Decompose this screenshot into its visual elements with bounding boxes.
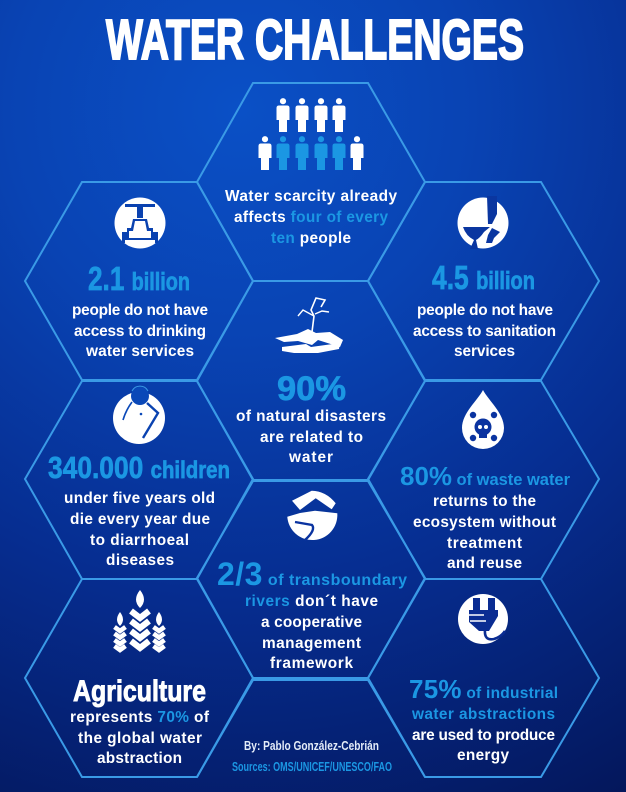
text: drinking water: people do not have (72, 302, 208, 319)
icon: people (258, 98, 364, 170)
text: sanitation: access to sanitation (413, 323, 556, 340)
text: scarcity: ten people (271, 230, 351, 247)
heading: 80% of waste water: 80% of waste water (400, 461, 571, 491)
text: waste water (413, 493, 556, 572)
heading: 2/3 of transboundary: 2/3 of transboundary (217, 556, 407, 592)
icon: child (113, 386, 165, 444)
heading: 340.000 children: 340.000 children (48, 450, 230, 485)
hexagon outline (25, 579, 253, 777)
text: drinking water (72, 302, 208, 360)
heading: 75% of industrial: 75% of industrial (409, 674, 558, 704)
text: children: diseases (106, 552, 174, 569)
icon: dry tree on cracked earth (275, 298, 343, 353)
text: children: to diarrhoeal (90, 532, 189, 549)
text: rivers: a cooperative (261, 614, 362, 631)
panel: credits (197, 680, 425, 777)
icon: toxic water drop (462, 390, 504, 449)
text: sanitation: services (454, 343, 515, 360)
text: children: under five years old (64, 490, 215, 507)
text: drinking water: access to drinking (74, 323, 206, 340)
hexagon outline (197, 83, 425, 281)
text: agriculture (70, 709, 210, 767)
text: natural disasters (236, 408, 386, 466)
hexagon outline (25, 381, 253, 579)
text: sanitation (413, 302, 556, 360)
hexagon outline (197, 281, 425, 480)
text: children: die every year due (70, 511, 210, 528)
hexagon outline (368, 381, 599, 579)
text: scarcity: affects four of every (234, 209, 388, 226)
text: industrial water: are used to produce (412, 727, 555, 744)
hexagon outline (368, 182, 599, 380)
sources: Sources: OMS/UNICEF/UNESCO/FAO (232, 760, 392, 774)
text: agriculture: abstraction (97, 750, 182, 767)
text: waste water: returns to the (433, 493, 536, 510)
hexagon outline (368, 579, 599, 777)
text: rivers: management (262, 635, 361, 652)
text: rivers (245, 593, 378, 672)
icon: valve (114, 198, 166, 248)
text: waste water: and reuse (447, 555, 522, 572)
heading: 90%: 90% (277, 370, 346, 408)
panel: sanitation (368, 182, 599, 380)
text: waste water: treatment (447, 535, 522, 552)
hexagon outline (197, 481, 425, 678)
heading: 4.5 billion: 4.5 billion (432, 259, 535, 296)
icon: plug (458, 594, 508, 644)
panel: waste water (368, 381, 599, 579)
author: By: Pablo González-Cebrián (244, 739, 379, 753)
text: agriculture: the global water (78, 730, 202, 747)
text: industrial water: water abstractions (411, 706, 555, 723)
text: industrial water (411, 706, 555, 764)
hexagon outline (197, 680, 425, 777)
icon: river (287, 491, 337, 540)
text: waste water: ecosystem without (413, 514, 556, 531)
icon: wheat (114, 590, 164, 650)
panel: industrial water (368, 579, 599, 777)
text: rivers: framework (270, 655, 353, 672)
icon: sanitation (458, 196, 508, 249)
text: scarcity: Water scarcity already (225, 188, 397, 205)
text: agriculture: represents 70% of (70, 709, 210, 726)
text: natural disasters: are related to (260, 429, 363, 446)
heading: 2.1 billion: 2.1 billion (88, 260, 190, 297)
panel: water scarcity (197, 83, 425, 281)
text: natural disasters: water (288, 449, 333, 466)
panel: transboundary rivers (197, 481, 425, 678)
text: drinking water: water services (85, 343, 194, 360)
hexagon outline (25, 182, 253, 380)
panel: children (25, 381, 253, 579)
panel: agriculture (25, 579, 253, 777)
text: sanitation: people do not have (417, 302, 553, 319)
heading: agriculture: Agriculture (73, 675, 206, 708)
text: rivers: rivers don´t have (245, 593, 378, 610)
text: children (64, 490, 215, 569)
text: industrial water: energy (457, 747, 509, 764)
text: scarcity (225, 188, 397, 247)
panel: natural disasters (197, 281, 425, 480)
text: natural disasters: of natural disasters (236, 408, 386, 425)
panel: drinking water (25, 182, 253, 380)
